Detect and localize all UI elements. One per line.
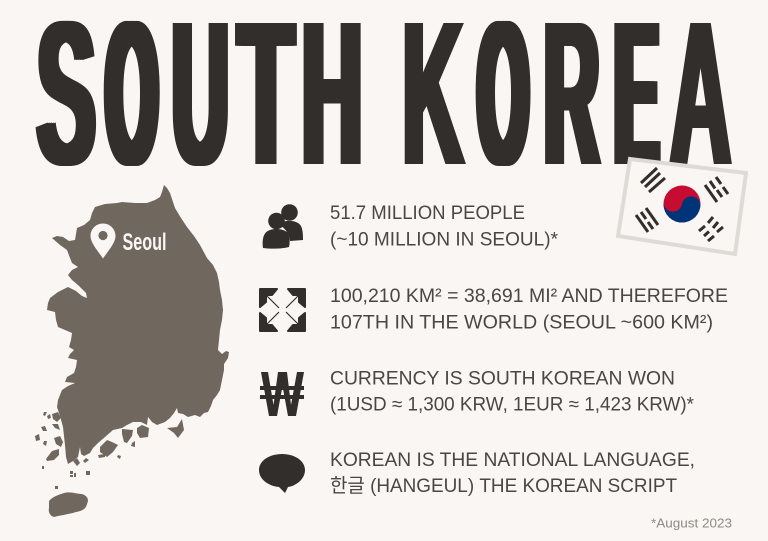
fact: language: 한글 (HANGEUL) THE KOREAN SCRIPT xyxy=(330,475,677,497)
trigram bars xyxy=(636,168,728,241)
islands xyxy=(49,492,88,517)
map label: Seoul: Seoul xyxy=(122,229,166,256)
fact: area xyxy=(330,285,728,334)
title xyxy=(36,0,732,208)
fact: currency: (1USD ≈ 1,300 KRW, 1EUR ≈ 1,423 KRW)* xyxy=(330,394,694,416)
icon: expand arrows xyxy=(260,289,305,331)
fact: language xyxy=(330,449,695,497)
icon: people xyxy=(263,204,303,249)
fact: language: KOREAN IS THE NATIONAL LANGUAGE, xyxy=(330,449,695,471)
fact: currency xyxy=(330,367,694,416)
taegeuk circle xyxy=(661,183,703,225)
fact: currency: CURRENCY IS SOUTH KOREAN WON xyxy=(330,367,675,389)
footnote: *August 2023 xyxy=(651,516,732,530)
map pin: Seoul xyxy=(90,224,116,258)
fact: population xyxy=(330,202,558,251)
icon: won currency sign xyxy=(260,372,304,416)
icon: speech bubble xyxy=(259,454,305,493)
fact: area: 107TH IN THE WORLD (SEOUL ~600 KM²) xyxy=(330,312,713,334)
fact: area: 100,210 KM² = 38,691 MI² AND THEREFORE xyxy=(330,285,728,307)
fact: population: (~10 MILLION IN SEOUL)* xyxy=(330,229,558,251)
map of South Korea xyxy=(35,185,229,517)
fact: population: 51.7 MILLION PEOPLE xyxy=(330,202,525,224)
flag of South Korea xyxy=(618,159,746,254)
